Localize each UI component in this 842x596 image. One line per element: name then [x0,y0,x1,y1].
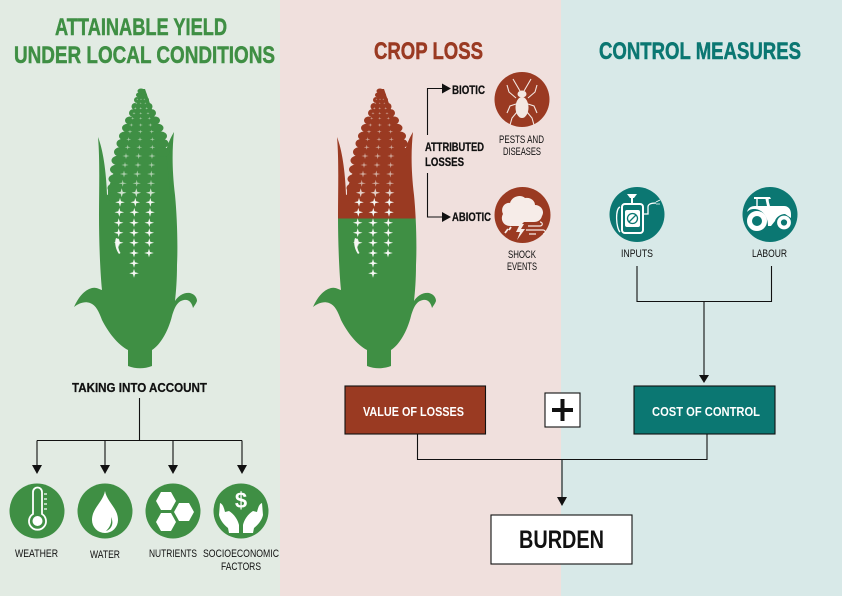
illustration: green corn cob [74,88,197,368]
heading: taking into account: TAKING INTO ACCOUNT [72,380,207,395]
label: attributed losses [425,140,484,169]
box: value of losses [345,386,486,434]
title: attainable yield: ATTAINABLE YIELD [55,14,227,41]
label: nutrients: NUTRIENTS [149,548,197,560]
title: attainable yield: UNDER LOCAL CONDITIONS [14,42,275,69]
arrow: to abiotic [428,173,451,222]
box: burden: BURDEN [519,526,604,554]
arrow: losses and control to burden [418,434,707,506]
label: water: WATER [90,549,120,561]
arrow: to biotic [428,84,451,135]
icon: water drop [78,484,132,538]
label: attributed losses: ATTRIBUTED [425,140,484,154]
box: burden [491,515,632,564]
arrow: inputs and labour to cost of control [637,266,772,383]
panel: attainable yield background [0,0,280,596]
label: pests and diseases [499,134,544,158]
panel: control measures background [561,0,842,596]
label: socioeconomic factors: SOCIOECONOMIC [203,548,279,560]
icon: shock events storm [494,187,550,243]
label: shock events [507,249,537,273]
label: socioeconomic factors: FACTORS [221,561,261,573]
label: abiotic: ABIOTIC [452,210,491,224]
icon: pest insect [494,72,550,127]
label: pests and diseases: DISEASES [503,146,541,158]
icon: socioeconomic hands and dollar [214,484,268,538]
icon: inputs sprayer [610,187,664,242]
panel: crop loss background [280,0,561,596]
illustration: red and green corn cob showing crop loss [313,88,436,368]
label: labour: LABOUR [752,248,787,260]
icon: plus sign [545,393,580,427]
label: attributed losses: LOSSES [425,155,464,169]
label: inputs: INPUTS [621,248,653,260]
arrows: factors tree [32,398,247,474]
label: weather: WEATHER [15,548,58,560]
label: socioeconomic factors [203,548,279,573]
box: cost of control [634,386,775,434]
box: cost of control: COST OF CONTROL [652,404,760,419]
title: attainable yield [14,14,275,69]
label: pests and diseases: PESTS AND [499,134,544,146]
label: shock events: SHOCK [508,249,536,261]
box: value of losses: VALUE OF LOSSES [363,404,464,419]
label: biotic: BIOTIC [452,83,485,97]
label: shock events: EVENTS [507,261,537,273]
icon: socioeconomic hands and dollar: $ [235,488,247,513]
icon: weather thermometer [10,484,64,538]
title: crop loss: CROP LOSS [374,38,483,65]
icon: nutrients hexagons [146,484,200,538]
icon: labour tractor [742,187,798,242]
